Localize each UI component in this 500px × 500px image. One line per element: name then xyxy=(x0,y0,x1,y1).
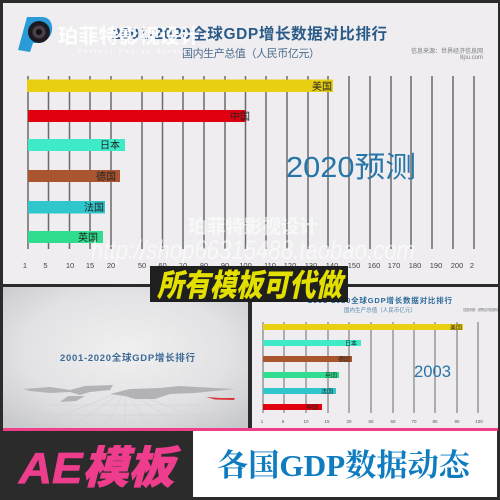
bar: 德国 2003 xyxy=(263,356,352,364)
bar: 法国 2003: 法国 xyxy=(321,388,333,396)
axis labels: 1 xyxy=(23,261,27,270)
axis labels: 20 xyxy=(107,261,115,270)
year label: 2003: 2003 xyxy=(414,362,451,381)
year label: 2020预测: 2020预测 xyxy=(286,151,416,184)
bar: 英国 xyxy=(28,231,103,244)
bar: 美国 2003 xyxy=(263,324,463,332)
axis labels: 190 xyxy=(430,261,442,270)
axis labels: 5 xyxy=(43,261,48,270)
logo tagline: Perfect Design Studio xyxy=(78,49,186,55)
watermark text xyxy=(91,216,415,265)
world map xyxy=(23,385,235,402)
banner: all templates xyxy=(150,266,348,303)
axis labels small: 20 xyxy=(346,419,352,424)
axis labels small: 80 xyxy=(432,419,438,424)
bar: 中国 2003 xyxy=(263,404,322,412)
watermark text: http://shop66315488.taobao.com xyxy=(91,235,415,265)
axis labels: 180 xyxy=(409,261,421,270)
axis labels: 110 xyxy=(264,261,276,270)
AE template heading: AE模板 xyxy=(18,444,181,493)
axis labels small: 60 xyxy=(390,419,396,424)
axis labels: 50 xyxy=(138,261,146,270)
bar: 美国 xyxy=(27,80,333,93)
axis labels: 200 xyxy=(451,261,463,270)
chart title: 2001-2020全球GDP增长数据对比排行 xyxy=(112,24,387,43)
bar: 美国: 美国 xyxy=(312,80,332,93)
bar: 法国: 法国 xyxy=(84,201,104,214)
floor perspective lines xyxy=(30,390,225,428)
data source: 8pu.com xyxy=(460,55,483,61)
axis labels small: 50 xyxy=(368,419,374,424)
axis labels small: 1 xyxy=(261,419,264,424)
axis labels: 70 xyxy=(179,261,187,270)
axis labels: 15 xyxy=(86,261,94,270)
bar: 中国 xyxy=(28,110,250,123)
bar: 日本 2003 xyxy=(263,340,361,348)
watermark logo xyxy=(18,17,200,55)
bar: 德国: 德国 xyxy=(96,170,116,183)
grid lines small xyxy=(263,322,478,413)
axis labels: 2 xyxy=(470,261,474,270)
bar: 德国 2003: 德国 xyxy=(338,356,350,364)
banner text: 所有模板可代做 xyxy=(157,268,346,303)
axis labels xyxy=(23,261,474,270)
axis labels: 150 xyxy=(348,261,360,270)
axis labels: 80 xyxy=(200,261,208,270)
bar: 法国 2003 xyxy=(263,388,336,396)
axis labels: 130 xyxy=(305,261,317,270)
axis labels: 140 xyxy=(326,261,338,270)
chart subtitle: 国内生产总值（人民币亿元） xyxy=(182,46,320,60)
bar: 中国 2003: 中国 xyxy=(306,404,318,412)
bar: 德国 xyxy=(28,170,120,183)
axis labels: 170 xyxy=(388,261,400,270)
panel: white caption xyxy=(193,431,497,497)
grid lines xyxy=(28,76,474,249)
panel: intro slide xyxy=(3,287,248,428)
data source xyxy=(411,47,483,61)
bar: 美国 2003: 美国 xyxy=(450,324,462,332)
axis labels small: 100 xyxy=(475,419,483,424)
axis labels small: 70 xyxy=(411,419,417,424)
logo wordmark: 珀菲特影视设计 xyxy=(58,25,200,48)
axis labels: 10 xyxy=(66,261,74,270)
axis labels: 100 xyxy=(239,261,252,270)
bar: 日本: 日本 xyxy=(100,138,120,152)
axis labels small: 5 xyxy=(282,419,285,424)
bar: 中国: 中国 xyxy=(230,110,250,123)
bar: 日本 2003: 日本 xyxy=(345,340,357,348)
axis labels small: 90 xyxy=(454,419,460,424)
axis labels small: 10 xyxy=(303,419,309,424)
red highlight on map xyxy=(206,397,235,400)
caption text: 各国GDP数据动态 xyxy=(217,448,472,483)
panel: 2003 bar chart xyxy=(252,287,498,428)
small chart subtitle: 国内生产总值（人民币亿元） xyxy=(344,306,416,314)
watermark text: 珀菲特影视设计 xyxy=(188,216,318,238)
axis labels small xyxy=(261,419,483,424)
axis labels: 60 xyxy=(158,261,167,270)
small chart title: 2001-2020全球GDP增长数据对比排行 xyxy=(308,295,452,305)
bar: 英国: 英国 xyxy=(78,231,98,244)
axis labels: 90 xyxy=(221,261,229,270)
icon: P camera logo xyxy=(18,17,52,52)
axis labels: 120 xyxy=(284,261,296,270)
axis labels small: 15 xyxy=(324,419,330,424)
bar: 英国 2003 xyxy=(263,372,339,380)
data source: 信息来源：世界经济信息网 xyxy=(411,47,483,55)
small data source: 信息来源：世界经济信息网 xyxy=(463,307,498,312)
bar: 法国 xyxy=(28,201,105,214)
axis labels: 160 xyxy=(368,261,380,270)
intro title: 2001-2020全球GDP增长排行 xyxy=(60,352,195,364)
bar: 英国 2003: 英国 xyxy=(325,372,337,380)
pink divider xyxy=(3,428,498,431)
bar: 日本 xyxy=(28,138,125,152)
panel: main bar chart xyxy=(3,3,498,284)
